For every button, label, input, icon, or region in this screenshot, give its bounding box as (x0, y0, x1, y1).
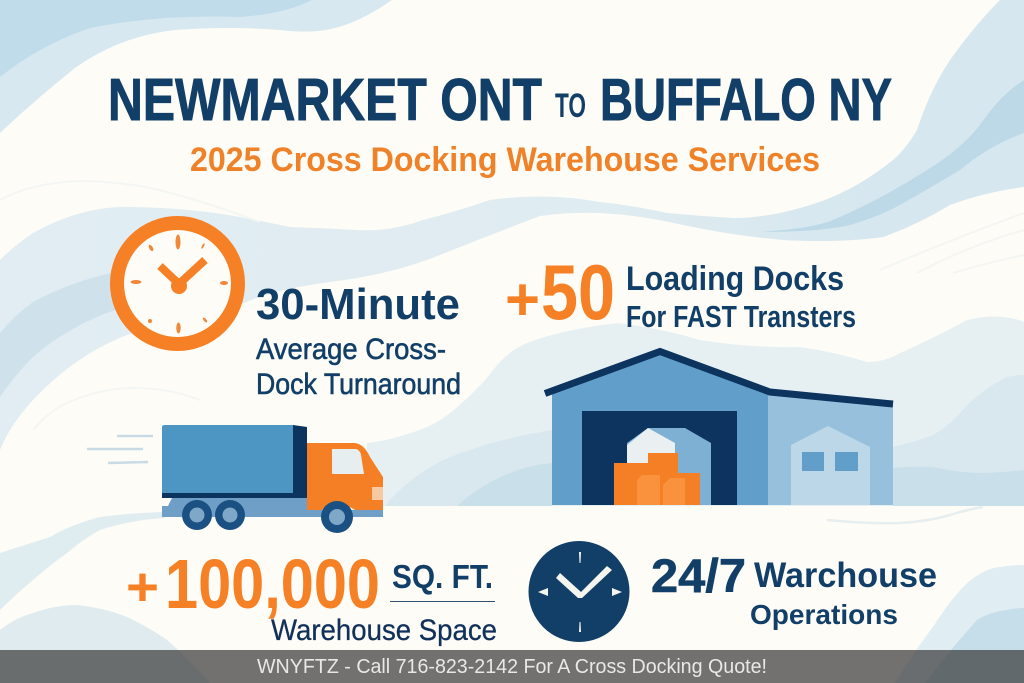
+100,000 stat: Warehouse Space (271, 614, 497, 647)
+50 loading docks: + (505, 266, 540, 333)
+100,000 stat: + (126, 557, 159, 617)
24/7 operations text: 24/7 (651, 549, 746, 602)
subtitle: 2025 Cross Docking Warehouse Services (190, 141, 820, 179)
+100,000 stat (126, 545, 497, 647)
+50 loading docks (505, 248, 856, 336)
24/7 operations text: Operations (750, 599, 898, 630)
30-minute text: Average Cross- (256, 333, 446, 366)
24/7 operations text (651, 549, 937, 630)
title: BUFFALO NY (600, 67, 892, 133)
icon: truck (87, 425, 383, 533)
+50 loading docks: 50 (541, 248, 615, 336)
footer banner: WNYFTZ - Call 716-823-2142 For A Cross Docking Quote! (257, 656, 767, 678)
+50 loading docks: For FAST Transters (626, 299, 856, 334)
+100,000 stat: SQ. FT. (392, 558, 493, 595)
icon: warehouse (545, 351, 893, 505)
30-minute text (256, 280, 461, 401)
footer banner (0, 650, 1024, 683)
title: NEWMARKET ONT (108, 67, 542, 133)
icon: navy clock (528, 541, 630, 642)
30-minute text: Dock Turnaround (256, 368, 461, 401)
+100,000 stat: 100,000 (165, 545, 380, 623)
+50 loading docks: Loading Docks (626, 260, 844, 298)
30-minute text: 30-Minute (256, 280, 460, 329)
icon: orange clock (117, 223, 238, 344)
24/7 operations text: Warchouse (754, 556, 937, 595)
title (108, 67, 892, 133)
title: TO (555, 87, 586, 125)
